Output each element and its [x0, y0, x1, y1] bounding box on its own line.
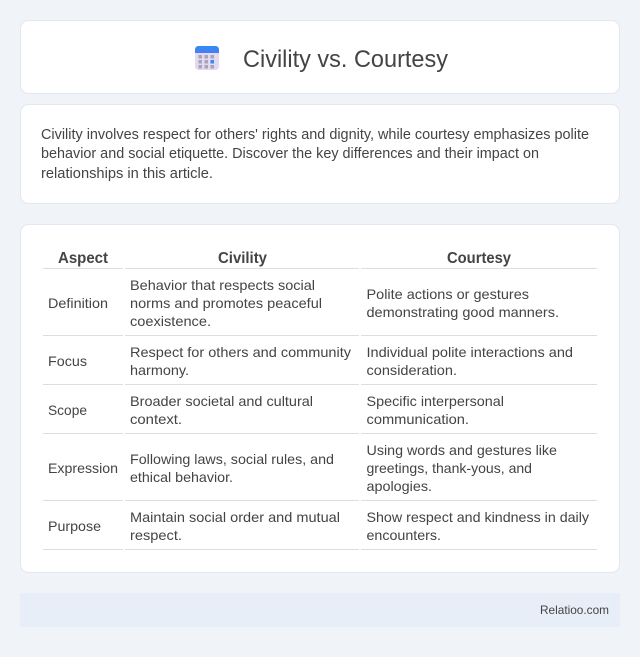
- table row: scope: Broader societal and cultural: [130, 393, 313, 409]
- footer bar: Relatioo.com: [540, 603, 609, 617]
- table row: focus: Respect for others and community: [130, 344, 351, 360]
- table row: scope: [48, 393, 504, 427]
- table row: focus: [48, 344, 573, 378]
- table row: purpose: Show respect and kindness in daily: [366, 509, 589, 525]
- table header row: Courtesy: [447, 250, 511, 267]
- table row: scope: Specific interpersonal: [366, 393, 504, 409]
- panel: introduction: [20, 104, 620, 204]
- table row: purpose: Purpose: [48, 518, 101, 534]
- table row: expression: [48, 442, 557, 494]
- table row: definition: coexistence.: [130, 313, 211, 329]
- table row: expression: Expression: [48, 460, 118, 476]
- table row: scope: Scope: [48, 402, 87, 418]
- table row: definition: Polite actions or gestures: [366, 286, 529, 302]
- panel: comparison table: [20, 224, 620, 572]
- table row: definition: [48, 277, 559, 329]
- icon: calendar: [195, 46, 219, 70]
- table row: focus: Individual polite interactions and: [366, 344, 573, 360]
- table row: expression: greetings, thank-yous, and: [366, 460, 532, 476]
- table row: expression: apologies.: [366, 478, 432, 494]
- text block: introduction: relationships in this article.: [41, 166, 213, 182]
- footer bar: [20, 593, 620, 627]
- table row: focus: Focus: [48, 353, 87, 369]
- table header row: [58, 250, 511, 267]
- text block: introduction: [41, 127, 589, 182]
- table row: definition: Behavior that respects social: [130, 277, 315, 293]
- text block: introduction: Civility involves respect for others' rights and dignity, while courtesy emphasizes polite: [41, 127, 589, 143]
- table header row: Aspect: [58, 250, 109, 267]
- table row: scope: context.: [130, 411, 182, 427]
- table row: definition: Definition: [48, 295, 108, 311]
- table header row: Civility: [218, 250, 267, 267]
- title: Civility vs. Courtesy: [243, 46, 448, 73]
- table row: focus: consideration.: [366, 362, 457, 378]
- table row: purpose: respect.: [130, 527, 182, 543]
- table row: definition: norms and promotes peaceful: [130, 295, 322, 311]
- table row: expression: Using words and gestures like: [366, 442, 557, 458]
- table row: definition: demonstrating good manners.: [366, 304, 559, 320]
- table row: expression: Following laws, social rules, and: [130, 451, 334, 467]
- text block: introduction: behavior and social etiquette. Discover the key differences and their impact on: [41, 146, 539, 162]
- table row: expression: ethical behavior.: [130, 469, 233, 485]
- panel: title card: [20, 20, 620, 94]
- table row: focus: harmony.: [130, 362, 189, 378]
- table row: purpose: encounters.: [366, 527, 441, 543]
- table row: scope: communication.: [366, 411, 469, 427]
- table row: purpose: [48, 509, 589, 543]
- table row: purpose: Maintain social order and mutual: [130, 509, 340, 525]
